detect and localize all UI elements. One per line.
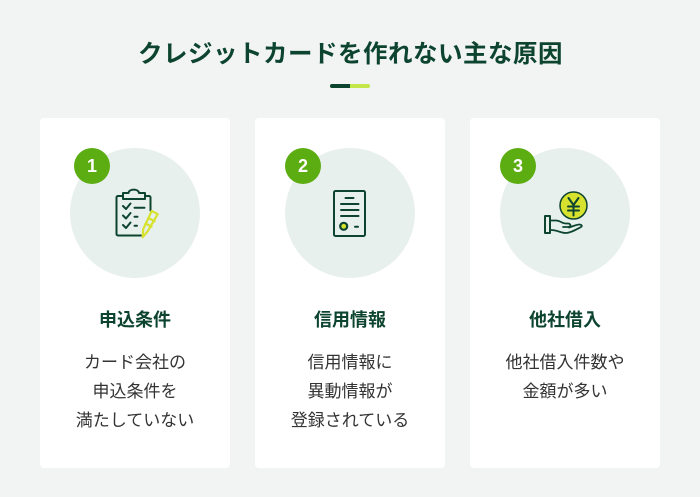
panel: card 2 credit information bbox=[255, 118, 445, 468]
card heading: 他社借入 bbox=[529, 310, 601, 330]
icon: clipboard checklist with pencil bbox=[116, 188, 159, 238]
icon circle background bbox=[500, 148, 630, 278]
title: クレジットカードを作れない主な原因 bbox=[138, 41, 563, 68]
card text: 満たしていない bbox=[76, 411, 194, 430]
card heading: 申込条件 bbox=[99, 310, 171, 330]
number badge 2 bbox=[285, 148, 321, 184]
number badge 3: 3 bbox=[513, 156, 523, 176]
number badge 3 bbox=[500, 148, 536, 184]
panel: card 3 borrowing from other companies bbox=[470, 118, 660, 468]
card text: 異動情報が bbox=[308, 382, 392, 401]
card text bbox=[76, 353, 194, 430]
icon circle background bbox=[285, 148, 415, 278]
panel: card 1 application conditions bbox=[40, 118, 230, 468]
card text: カード会社の bbox=[84, 353, 186, 372]
icon circle background bbox=[70, 148, 200, 278]
icon: document with seal bbox=[333, 190, 366, 237]
card text: 登録されている bbox=[291, 411, 409, 430]
card text: 金額が多い bbox=[522, 382, 608, 401]
title underline accent bbox=[330, 84, 370, 88]
card text: 信用情報に bbox=[308, 353, 392, 372]
card text bbox=[291, 353, 409, 430]
card text bbox=[506, 353, 624, 401]
number badge 1 bbox=[74, 148, 110, 184]
number badge 1: 1 bbox=[87, 156, 97, 176]
card text: 申込条件を bbox=[92, 382, 178, 401]
card heading: 信用情報 bbox=[314, 310, 386, 330]
card text: 他社借入件数や bbox=[506, 353, 624, 372]
number badge 2: 2 bbox=[298, 156, 308, 176]
icon: hand holding yen coin bbox=[544, 191, 588, 234]
